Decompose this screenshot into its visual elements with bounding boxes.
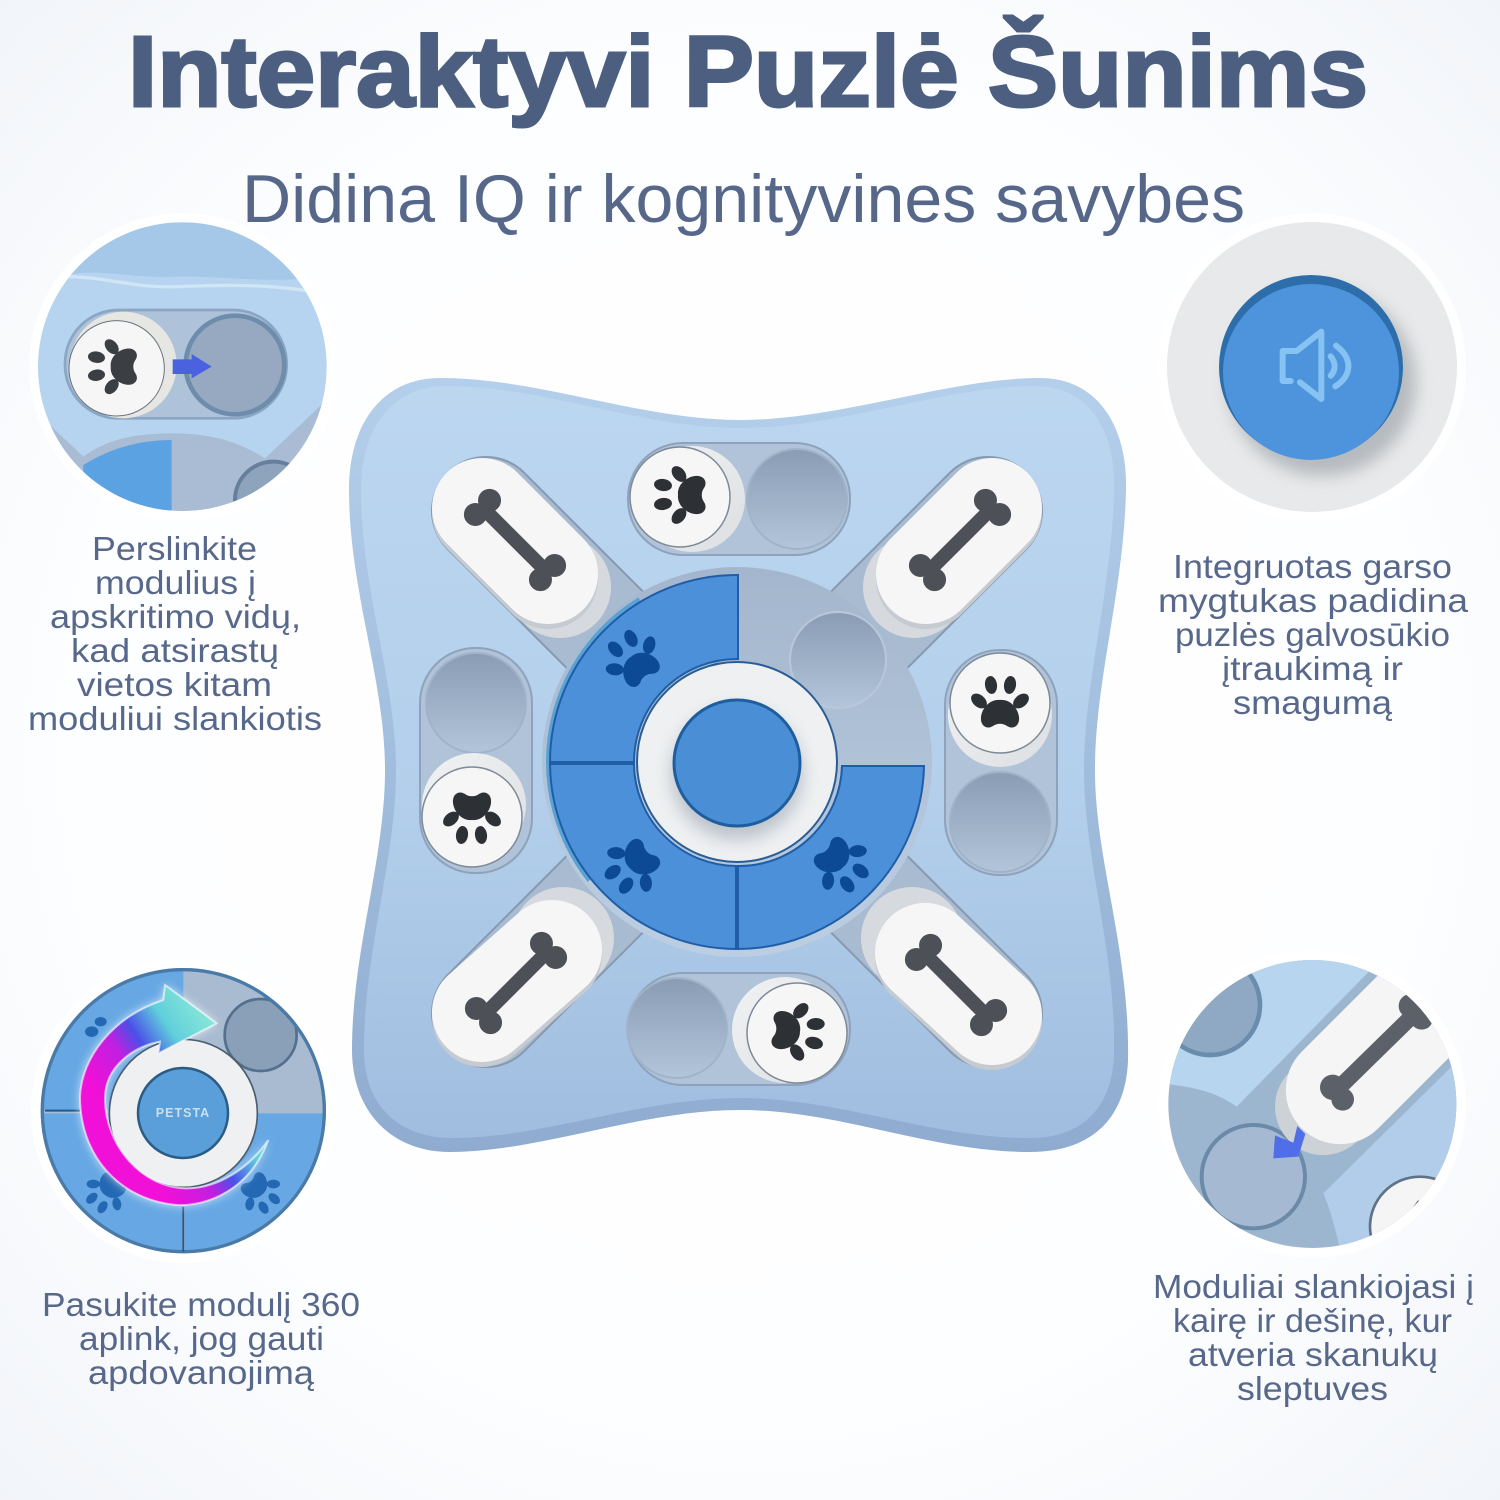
text block: rotate module: aplink, jog gauti [79,1320,324,1357]
text block: rotate module [42,1286,360,1391]
text block: sound button: Integruotas garso [1173,548,1452,585]
text block: hiding spots [1153,1268,1474,1407]
board body [349,378,1128,1152]
bone slider top right [863,485,1015,638]
bone slider bottom right [861,887,1011,1040]
text block: slide modules: moduliui slankiotis [28,700,322,737]
board top face [361,386,1114,1138]
diagonal recess channels [486,511,988,1013]
text block: sound button: įtraukimą ir [1222,650,1403,687]
subtitle: Didina IQ ir kognityvines savybes [242,161,1245,237]
center button: PETSTA [138,1068,228,1158]
text block: hiding spots: kairę ir dešinę, kur [1173,1302,1452,1339]
text block: slide modules [28,530,322,737]
icon: speaker [1283,332,1348,399]
panel: rotate module detail [40,968,326,1254]
text block: slide modules: Perslinkite [92,530,257,567]
panel: sound button detail [1158,213,1466,521]
left slot [420,648,532,873]
text block: hiding spots: sleptuves [1237,1370,1388,1407]
text block: rotate module: Pasukite modulį 360 [42,1286,360,1323]
bone slider bottom left [461,887,614,1038]
text block: hiding spots: atveria skanukų [1188,1336,1438,1373]
center button: PETSTA: PETSTA [156,1106,210,1120]
title: Interaktyvi Puzlė Šunims [128,16,1368,128]
text block: sound button: smagumą [1233,684,1393,721]
text block: slide modules: modulius į [95,564,256,601]
text block: sound button: puzlės galvosūkio [1175,616,1450,653]
center blue button [671,700,803,840]
rotating ring [549,575,924,949]
text block: sound button: mygtukas padidina [1158,582,1469,619]
white center ring [637,662,837,862]
panel: slide module detail [38,222,327,511]
ring paws [590,618,884,909]
central recess [542,567,932,957]
text block: rotate module: apdovanojimą [88,1354,315,1391]
puzzle board [349,378,1128,1152]
text block: sound button [1158,548,1469,721]
icon: rotation arrow [80,985,268,1205]
text block: slide modules: vietos kitam [77,666,272,703]
text block: hiding spots: Moduliai slankiojasi į [1153,1268,1474,1305]
bottom slot [627,973,850,1085]
text block: slide modules: kad atsirastų [71,632,279,669]
bone slider top left [460,485,611,638]
center hole [790,612,886,708]
text block: slide modules: apskritimo vidų, [50,598,301,635]
top slot [628,443,850,555]
right slot [945,650,1057,875]
panel: sliding hiding spots detail [1168,960,1456,1248]
